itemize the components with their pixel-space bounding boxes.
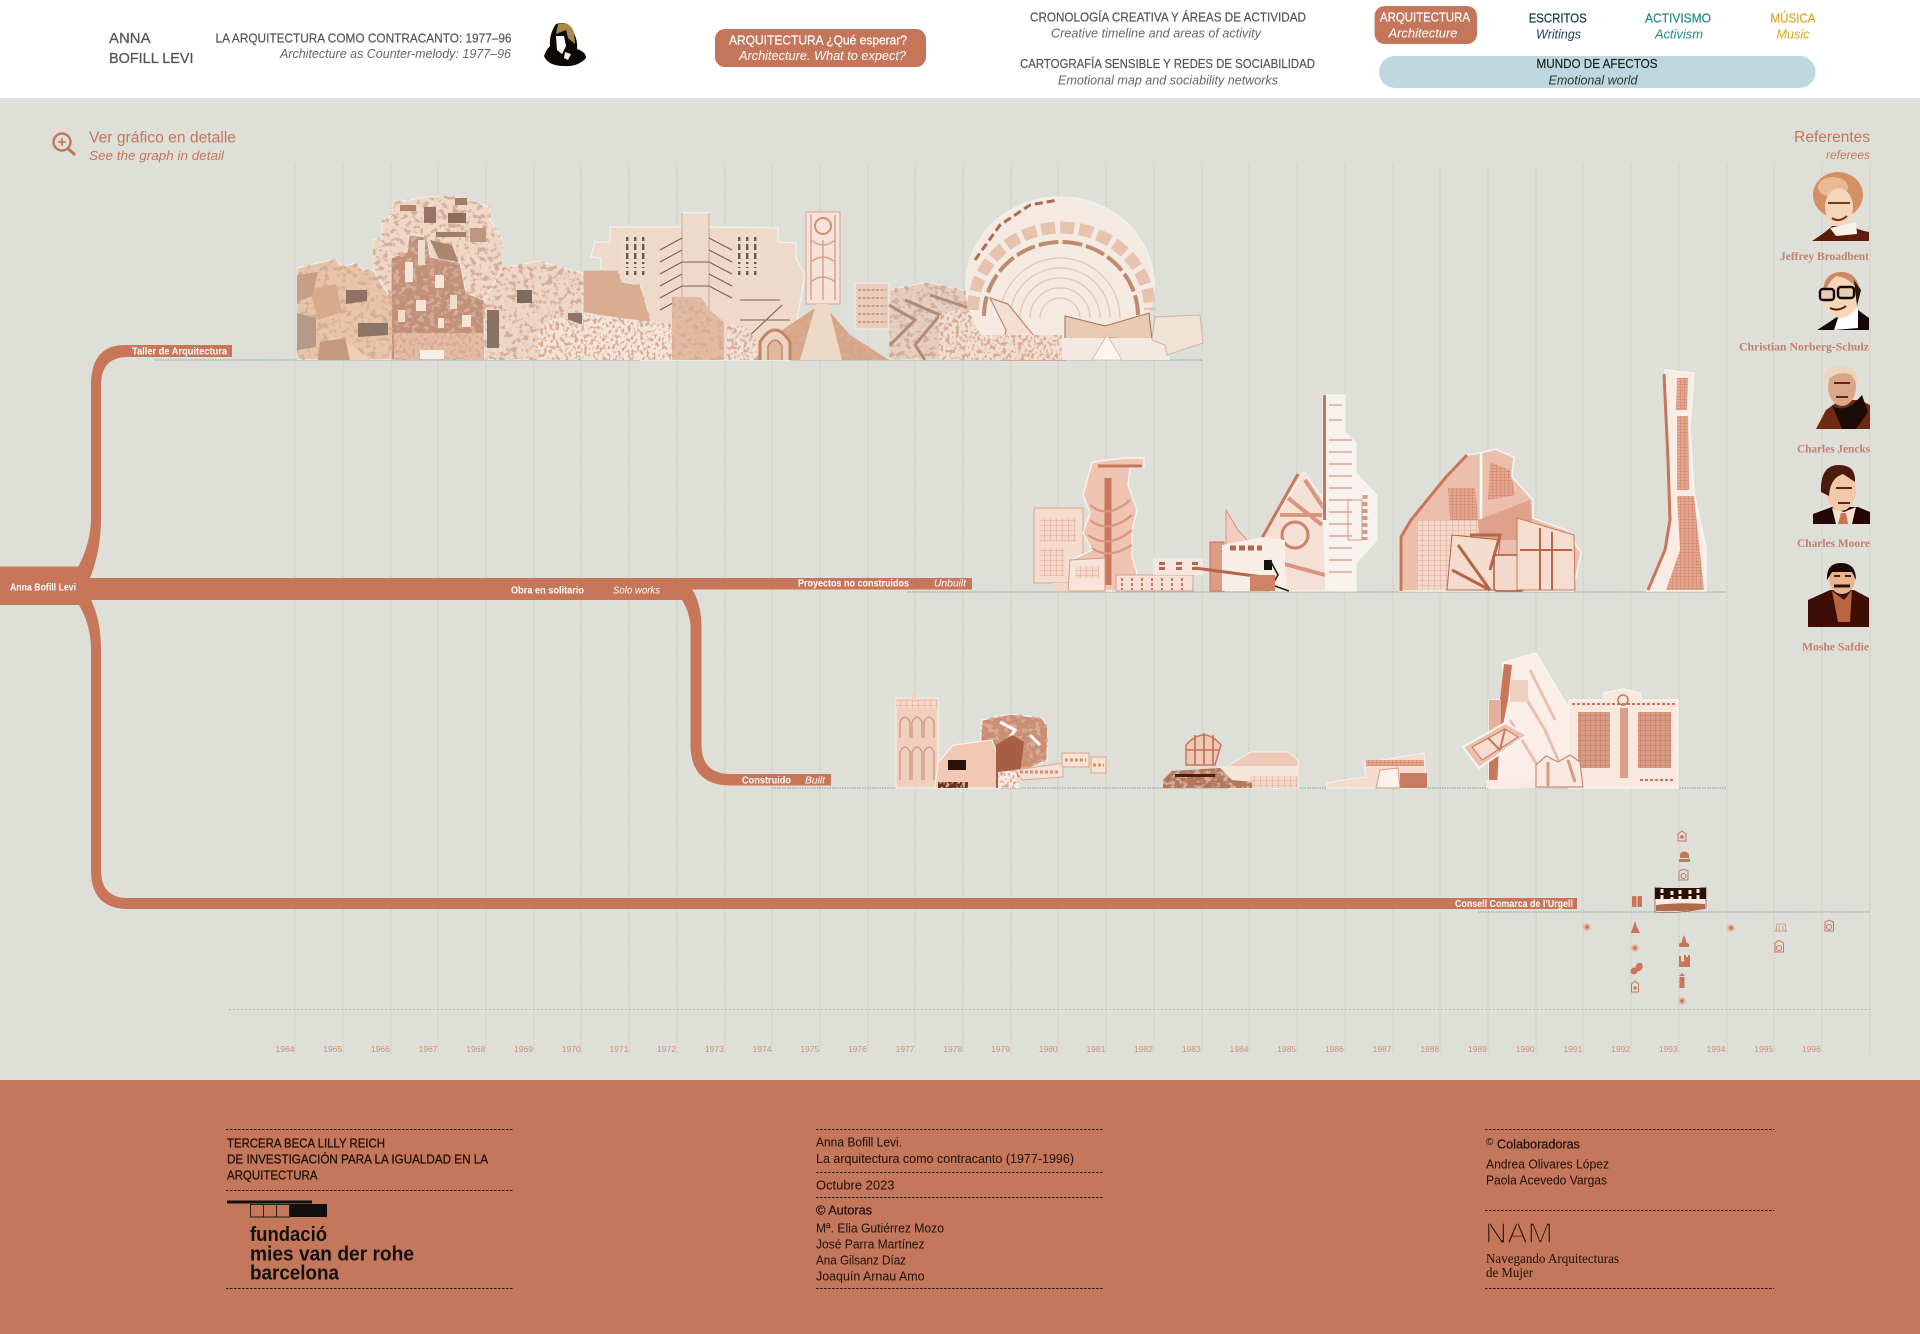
footer: authors — [816, 1204, 944, 1284]
icon: house heart 1995 — [1775, 940, 1784, 952]
footer: authors: Joaquín Arnau Amo — [816, 1270, 925, 1284]
year axis labels: 1980 — [1039, 1044, 1058, 1054]
footer: authors: © Autoras — [816, 1204, 872, 1218]
tall plan tower — [1323, 395, 1377, 591]
portrait: Jeffrey Broadbent: Jeffrey Broadbent — [1780, 251, 1869, 263]
portrait: Charles Jencks — [1797, 365, 1871, 456]
footer: publication: Octubre 2023 — [816, 1178, 895, 1192]
footer: collaborators: Paola Acevedo Vargas — [1486, 1174, 1607, 1188]
slender tower plan — [1647, 370, 1706, 591]
year axis labels: 1990 — [1516, 1044, 1535, 1054]
portrait: Jeffrey Broadbent — [1780, 172, 1869, 263]
top stepped block — [373, 196, 503, 305]
icons: Consell Comarca photo and activity symbols — [1583, 831, 1834, 1005]
ornamental tower — [806, 212, 840, 304]
year axis labels: 1994 — [1707, 1044, 1726, 1054]
arched tower — [896, 694, 938, 788]
label: built: Built — [805, 776, 826, 786]
carved panel — [855, 283, 889, 329]
author name — [109, 30, 194, 67]
year axis labels: 1996 — [1802, 1044, 1821, 1054]
label: Taller de Arquitectura: Taller de Arquitectura — [132, 346, 227, 358]
logo: fundació mies van der rohe: fundació — [250, 1224, 327, 1246]
footer: authors: Ana Gilsanz Díaz — [816, 1254, 906, 1268]
year axis labels: 1979 — [991, 1044, 1010, 1054]
icon: church 1992 — [1632, 981, 1638, 992]
icon: twin bottles — [1632, 896, 1642, 907]
footer: authors: José Parra Martínez — [816, 1238, 924, 1252]
bust model — [1536, 755, 1583, 787]
footer: authors: Mª. Elia Gutiérrez Mozo — [816, 1222, 944, 1236]
year axis labels — [276, 1044, 1821, 1054]
icon: house heart 1 — [1679, 869, 1688, 880]
footer: grant title: DE INVESTIGACIÓN PARA LA IGUALDAD EN LA — [227, 1152, 489, 1166]
footer — [0, 1080, 1920, 1334]
spine plan — [1068, 458, 1144, 591]
author name: ANNA — [109, 30, 151, 47]
portrait: Moshe Safdie — [1802, 563, 1869, 654]
logo: NAM: NAM — [1485, 1218, 1553, 1250]
footer: publication — [816, 1136, 1074, 1192]
label: solo works: Solo works — [613, 586, 660, 596]
year axis labels: 1975 — [800, 1044, 819, 1054]
year axis labels: 1982 — [1134, 1044, 1153, 1054]
year axis labels: 1966 — [371, 1044, 390, 1054]
portrait: Christian Norberg-Schulz — [1739, 270, 1869, 354]
button: architecture, what to expect — [715, 29, 926, 67]
collage: Taller de Arquitectura works — [297, 196, 1203, 373]
button: architecture, what to expect: ARQUITECTURA ¿Qué esperar? — [729, 34, 907, 48]
logo: NAM — [1485, 1218, 1619, 1280]
tab: emotional world — [1379, 56, 1816, 88]
logo: fundació mies van der rohe — [227, 1200, 414, 1284]
collage: unbuilt projects — [1034, 370, 1706, 591]
icon: house heart 1996 — [1825, 920, 1834, 931]
left housing block — [297, 259, 395, 360]
sepia garden blob — [979, 714, 1048, 770]
footer: grant title — [227, 1136, 489, 1182]
year axis labels: 1985 — [1277, 1044, 1296, 1054]
block plan — [1034, 508, 1083, 591]
label: unbuilt: Unbuilt — [934, 578, 967, 590]
pink house — [935, 735, 1024, 788]
referees column — [1739, 129, 1871, 654]
year axis labels: 1976 — [848, 1044, 867, 1054]
icon: cone monument — [1631, 921, 1640, 933]
machine cluster — [1195, 537, 1289, 591]
label: solo works — [511, 586, 660, 596]
triangular plan — [1226, 472, 1326, 591]
footer: grant title: TERCERA BECA LILLY REICH — [227, 1136, 385, 1150]
year axis labels: 1978 — [943, 1044, 963, 1054]
portrait: Charles Moore: Charles Moore — [1797, 538, 1870, 550]
tab: music — [1770, 10, 1816, 42]
tab: writings: ESCRITOS — [1529, 12, 1587, 26]
icon: theatre masks — [1630, 961, 1644, 974]
icon: factory — [1679, 955, 1690, 967]
icon: tower — [1679, 973, 1685, 988]
nav: creative timeline: CRONOLOGÍA CREATIVA Y ÁREAS DE ACTIVIDAD — [1030, 10, 1306, 24]
tab: music: MÚSICA — [1770, 10, 1816, 26]
nav: creative timeline — [1030, 10, 1306, 40]
lower centre facades — [583, 270, 756, 360]
label: built: Construido — [742, 776, 791, 786]
large pink block plan — [1400, 449, 1581, 591]
see graph in detail: Ver gráfico en detalle — [89, 130, 236, 146]
year axis labels: 1988 — [1420, 1044, 1440, 1054]
year axis labels: 1993 — [1659, 1044, 1678, 1054]
nav: emotional map: Emotional map and sociability networks — [1058, 74, 1278, 88]
icon: star 1992 — [1631, 944, 1639, 952]
year axis labels: 1974 — [753, 1044, 772, 1054]
referees heading — [1794, 129, 1870, 162]
portrait: Christian Norberg-Schulz: Christian Norberg-Schulz — [1739, 342, 1869, 354]
chart background — [0, 98, 1920, 1082]
year axis labels: 1973 — [705, 1044, 724, 1054]
page title: Architecture as Counter-melody: 1977–96 — [279, 47, 511, 61]
label: Anna Bofill Levi: Anna Bofill Levi — [10, 582, 76, 594]
logo: fundació mies van der rohe: barcelona — [250, 1262, 340, 1284]
tab: emotional world: Emotional world — [1548, 74, 1639, 88]
header bar — [0, 0, 1920, 98]
logo: NAM: de Mujer — [1486, 1265, 1533, 1280]
logo: NAM: Navegando Arquitecturas — [1486, 1251, 1619, 1266]
year axis labels: 1995 — [1754, 1044, 1773, 1054]
portrait: Charles Jencks: Charles Jencks — [1797, 444, 1871, 456]
icon: star 1994 — [1727, 924, 1735, 932]
portrait: Charles Moore — [1797, 465, 1870, 550]
tab: writings: Writings — [1536, 28, 1581, 42]
year axis labels: 1986 — [1325, 1044, 1344, 1054]
year axis labels: 1991 — [1563, 1044, 1583, 1054]
author name: BOFILL LEVI — [109, 50, 194, 67]
year axis labels: 1992 — [1611, 1044, 1630, 1054]
page title: LA ARQUITECTURA COMO CONTRACANTO: 1977–96 — [216, 32, 512, 46]
tab: activism — [1645, 12, 1711, 42]
large site plan — [1486, 653, 1591, 788]
tab: music: Music — [1776, 28, 1810, 42]
nav: emotional map — [1020, 56, 1315, 88]
year axis labels: 1969 — [514, 1044, 533, 1054]
footer: collaborators — [1486, 1137, 1609, 1188]
icon: temple — [1679, 852, 1690, 862]
label: built — [742, 776, 826, 786]
year axis labels: 1968 — [466, 1044, 486, 1054]
year axis labels: 1977 — [896, 1044, 915, 1054]
year axis labels: 1984 — [1230, 1044, 1249, 1054]
connector: main trunk and branches — [0, 345, 1577, 909]
domed pavilion — [1163, 733, 1298, 788]
portrait: Moshe Safdie: Moshe Safdie — [1802, 642, 1869, 654]
collage: built works — [896, 653, 1678, 788]
year axis labels: 1967 — [419, 1044, 438, 1054]
logo: fundació mies van der rohe: mies van der rohe — [250, 1244, 414, 1266]
tab: architecture: ARQUITECTURA — [1380, 10, 1471, 24]
label: solo works: Obra en solitario — [511, 586, 584, 596]
axonometric box — [1463, 723, 1527, 768]
footer: collaborators: © — [1486, 1137, 1494, 1148]
row of small units — [1116, 558, 1203, 591]
amphitheatre plan — [966, 197, 1203, 373]
footer: collaborators: Colaboradoras — [1497, 1138, 1580, 1152]
tab: architecture — [1375, 6, 1477, 44]
branch labels — [10, 346, 1573, 910]
tab: activism: Activism — [1654, 28, 1703, 42]
icon: magnifier — [54, 134, 75, 155]
office building — [1569, 689, 1678, 788]
residential tower with chevrons — [591, 213, 805, 360]
see graph in detail: See the graph in detail — [89, 149, 225, 163]
label: Consell Comarca: Consell Comarca de l’Urgell — [1455, 899, 1573, 910]
icon: star 1993 — [1678, 997, 1686, 1005]
icon: bench — [1775, 924, 1787, 931]
year axis labels: 1971 — [609, 1044, 629, 1054]
small facade pieces — [1015, 753, 1106, 780]
nav: emotional map: CARTOGRAFÍA SENSIBLE Y REDES DE SOCIABILIDAD — [1020, 56, 1315, 71]
label: unbuilt: Proyectos no construidos — [798, 578, 909, 590]
year axis labels: 1972 — [657, 1044, 676, 1054]
year axis labels: 1981 — [1086, 1044, 1106, 1054]
icon: church 1993 — [1679, 935, 1689, 947]
terraced building — [1327, 753, 1427, 788]
photo: restored interior — [1655, 887, 1706, 912]
tab: architecture: Architecture — [1387, 26, 1458, 40]
mountain terrace — [889, 282, 1000, 360]
footer: publication: Anna Bofill Levi. — [816, 1136, 902, 1150]
right low block — [484, 261, 583, 360]
nav: creative timeline: Creative timeline and areas of activity — [1051, 26, 1262, 40]
tab: emotional world: MUNDO DE AFECTOS — [1536, 57, 1658, 71]
page title — [216, 32, 512, 61]
year axis labels: 1970 — [562, 1044, 581, 1054]
referees heading: Referentes — [1794, 129, 1870, 146]
year axis labels: 1983 — [1182, 1044, 1201, 1054]
icon: church top — [1678, 831, 1686, 841]
pyramid temple — [754, 303, 889, 360]
year axis labels: 1989 — [1468, 1044, 1487, 1054]
referees heading: referees — [1826, 148, 1870, 162]
footer: collaborators: Andrea Olivares López — [1486, 1158, 1609, 1172]
year axis labels: 1987 — [1373, 1044, 1392, 1054]
tab: activism: ACTIVISMO — [1645, 12, 1711, 26]
icon: star 1991 — [1583, 923, 1591, 931]
dark central tower — [391, 235, 484, 360]
portrait: Anna Bofill — [544, 23, 586, 66]
button: architecture, what to expect: Architecture. What to expect? — [738, 49, 906, 63]
footer: publication: La arquitectura como contracanto (1977-1996) — [816, 1152, 1074, 1166]
tab: writings — [1529, 12, 1587, 42]
year axis labels: 1964 — [276, 1044, 295, 1054]
footer: grant title: ARQUITECTURA — [227, 1168, 318, 1182]
see graph in detail — [54, 130, 236, 163]
year axis labels: 1965 — [323, 1044, 342, 1054]
